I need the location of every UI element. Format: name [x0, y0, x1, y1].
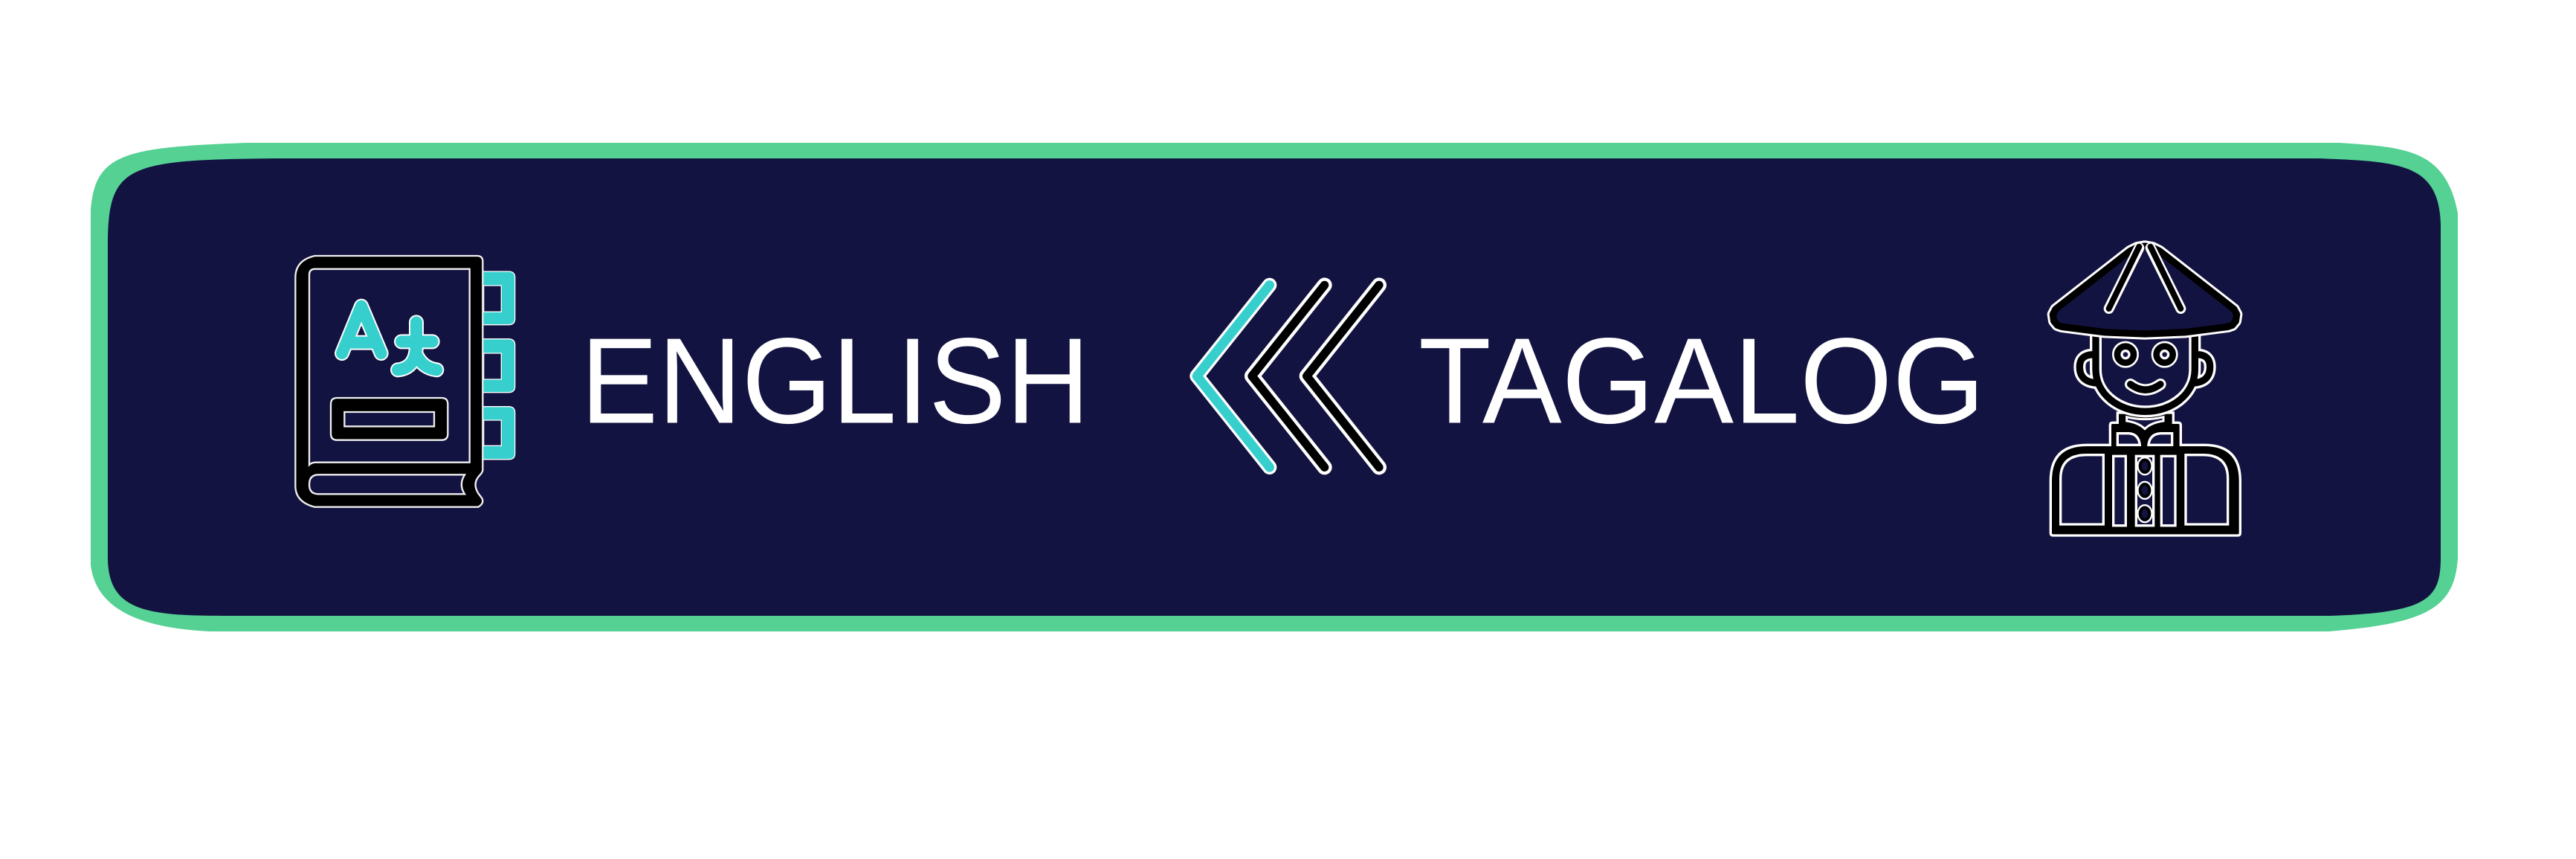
panel: green rounded border	[91, 143, 2458, 631]
teal chevron	[1197, 285, 1270, 467]
collar gap	[2127, 417, 2163, 429]
heading: source language: ENGLISH	[581, 312, 1090, 449]
letter A and character glyph	[342, 306, 436, 370]
shirt buttons	[2140, 460, 2150, 520]
eyes	[2117, 347, 2173, 363]
smile	[2131, 385, 2160, 390]
heading: target language: TAGALOG	[1418, 312, 1985, 449]
panel: navy background	[108, 158, 2441, 616]
right chevron	[1307, 285, 1379, 467]
icon: person wearing salakot hat	[2050, 246, 2240, 535]
icon: translation dictionary book	[295, 256, 515, 507]
head outline	[2079, 335, 2210, 411]
body and shirt	[2050, 413, 2240, 535]
middle chevron	[1252, 285, 1325, 467]
icon: direction chevrons	[1197, 285, 1379, 467]
book cover	[295, 256, 482, 507]
salakot hat	[2053, 246, 2237, 334]
book label plate	[331, 398, 448, 440]
book index tabs	[482, 271, 515, 460]
